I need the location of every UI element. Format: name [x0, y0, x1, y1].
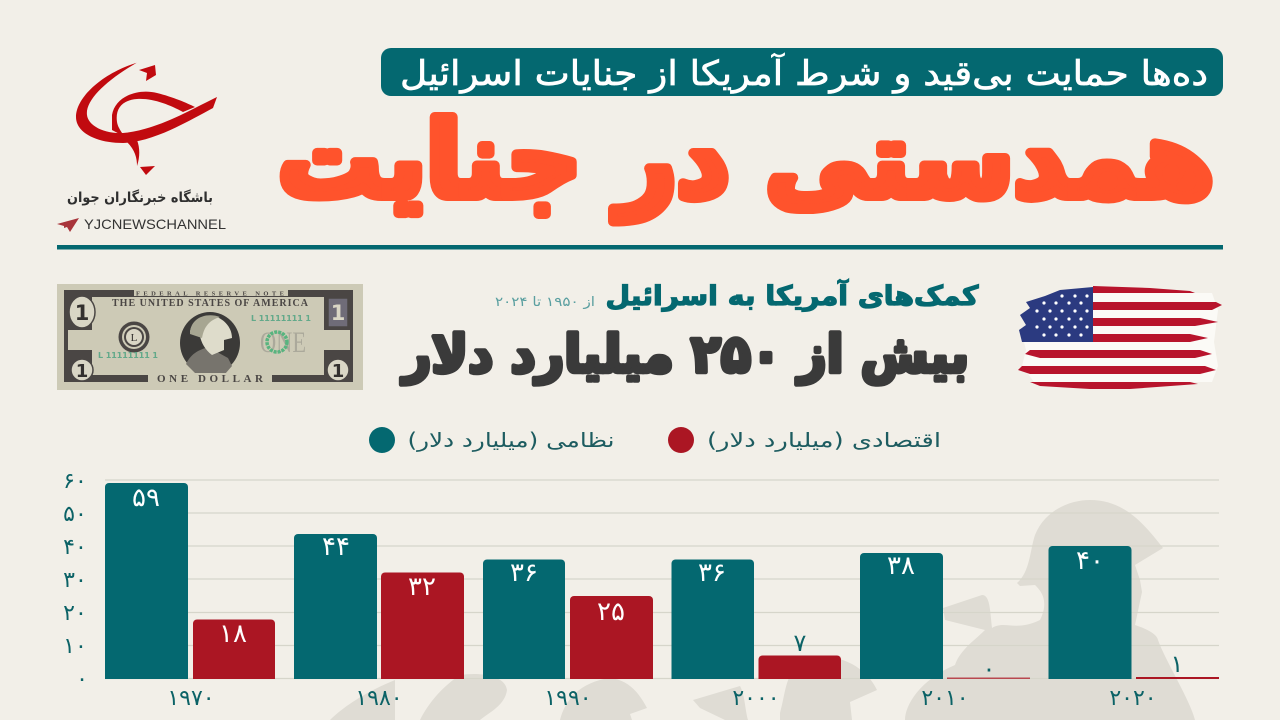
- y axis labels: ۲۰: [63, 601, 87, 626]
- y axis labels: ۳۰: [63, 568, 87, 593]
- year labels: ۱۹۷۰: [167, 686, 215, 711]
- logo mark: tail: [127, 140, 139, 166]
- icon: dollar bill: 1: [332, 361, 344, 382]
- logo mark: lower dot: [140, 166, 155, 175]
- bill seal: [118, 322, 150, 352]
- icon: dollar bill: 1: [75, 301, 89, 325]
- bar chart: [63, 469, 1219, 711]
- year labels: ۲۰۲۰: [1109, 686, 1157, 711]
- bar value labels: ۳۲: [408, 572, 436, 602]
- bar value labels: ۷: [794, 629, 807, 657]
- y axis labels: ۶۰: [63, 469, 87, 494]
- bar value labels: ۳۶: [510, 558, 538, 588]
- bar value labels: ۱۸: [219, 619, 247, 649]
- flag stars: [1035, 294, 1089, 337]
- bill serials: L 11111111 1: [98, 351, 158, 360]
- bar value labels: ۵۹: [132, 483, 160, 513]
- bar value labels: ۴۴: [322, 532, 350, 562]
- icon: dollar bill: 1: [331, 301, 345, 325]
- y axis labels: ۱۰: [63, 634, 87, 659]
- icon: american flag: [1018, 286, 1222, 389]
- main title: همدستی در جنایت: [278, 99, 1214, 221]
- icon: dollar bill: L: [131, 332, 138, 344]
- channel name: YJCNEWSCHANNEL: [84, 216, 226, 232]
- icon: dollar bill: 1: [76, 361, 88, 382]
- bill portrait: [180, 312, 240, 374]
- bill bottom text: [148, 373, 272, 383]
- bar value labels: ۴۰: [1076, 546, 1104, 576]
- key figure: بیش از ۲۵۰ میلیارد دلار: [400, 325, 969, 385]
- icon: dollar bill: THE UNITED STATES OF AMERICA: [112, 298, 309, 309]
- icon: dollar bill: FEDERAL RESERVE NOTE: [136, 290, 284, 298]
- flag canton: [1019, 287, 1093, 342]
- grid lines: [105, 480, 1219, 678]
- year labels: ۱۹۸۰: [355, 686, 403, 711]
- subtitle banner: ده‌ها حمایت بی‌قید و شرط آمریکا از جنایات اسرائیل: [400, 53, 1208, 94]
- bill watermark: ONE: [260, 326, 306, 359]
- divider: [57, 245, 1223, 250]
- logo caption: باشگاه خبرنگاران جوان: [67, 189, 213, 206]
- icon: dollar bill: L 11111111 1: [251, 314, 311, 323]
- bar value labels: ۳۸: [887, 551, 915, 581]
- bar value labels: ۲۵: [597, 597, 625, 627]
- icon: dollar bill: ONE DOLLAR: [157, 373, 264, 385]
- bill top text: [134, 290, 288, 296]
- icon: dollar bill: [57, 284, 363, 390]
- soldier silhouettes background: [330, 500, 1195, 720]
- logo: [76, 63, 217, 175]
- logo mark: inner arch: [112, 92, 195, 137]
- logo mark: upper dot: [139, 65, 156, 81]
- year labels: ۲۰۰۰: [732, 686, 780, 711]
- bar value labels: [132, 483, 1183, 683]
- small date range: از ۱۹۵۰ تا ۲۰۲۴: [495, 295, 595, 310]
- bill corner numerals: [69, 296, 349, 381]
- y axis labels: ۵۰: [63, 502, 87, 527]
- year labels: ۱۹۹۰: [544, 686, 592, 711]
- legend: اقتصادی (میلیارد دلار): [707, 428, 941, 452]
- military bars: [105, 483, 1132, 679]
- bar value labels: ۳۶: [698, 558, 726, 588]
- bar value labels: ۱: [1171, 650, 1183, 678]
- year labels: [167, 686, 1157, 711]
- bar value labels: ۰: [983, 655, 995, 683]
- y axis labels: ۴۰: [63, 535, 87, 560]
- y axis labels: [63, 469, 88, 692]
- section heading: کمک‌های آمریکا به اسرائیل: [606, 279, 979, 312]
- year labels: ۲۰۱۰: [921, 686, 969, 711]
- icon: paper plane: [57, 218, 79, 232]
- legend: نظامی (میلیارد دلار): [408, 428, 614, 452]
- y axis labels: ۰: [76, 667, 88, 692]
- legend: [369, 427, 941, 453]
- economic bars: [193, 572, 1219, 679]
- logo mark: crescent and band: [76, 63, 217, 143]
